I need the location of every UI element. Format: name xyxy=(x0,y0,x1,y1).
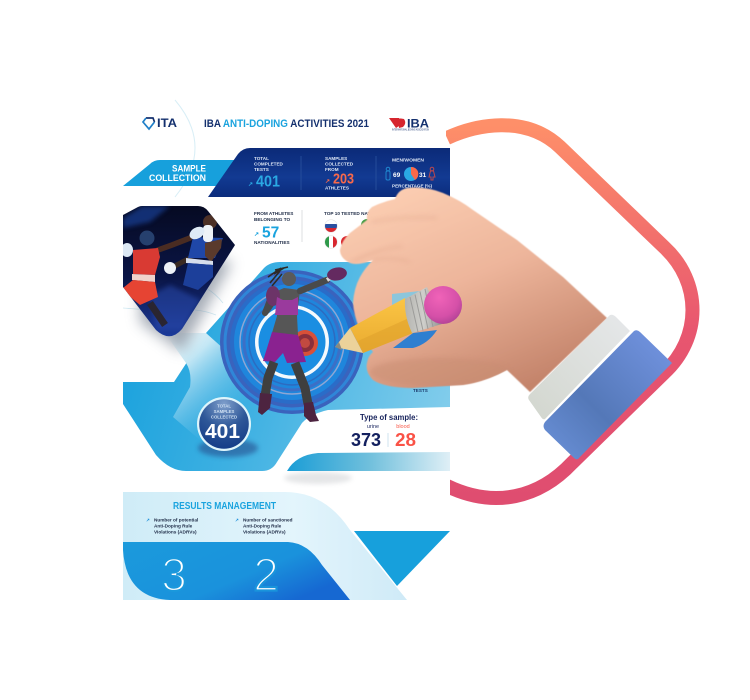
samples collected: COLLECTED xyxy=(325,162,354,166)
total completed tests: TOTAL xyxy=(254,156,269,161)
target rings xyxy=(220,270,364,414)
tests label: TESTS xyxy=(413,388,428,393)
nationalities block: NATIONALITIES xyxy=(254,240,290,245)
potential ADRVs text: Anti-Doping Rule xyxy=(154,524,193,528)
number: sanctioned: 2 xyxy=(253,548,279,600)
type of sample xyxy=(352,414,418,447)
total completed tests: COMPLETED xyxy=(254,162,284,166)
jacket cuff xyxy=(544,330,672,459)
nationalities block: 57 xyxy=(262,224,279,242)
infographic sheet xyxy=(121,100,450,600)
panel: photo of two boxers xyxy=(121,206,235,352)
title: IBA ANTI-DOPING ACTIVITIES 2021 xyxy=(204,118,369,130)
men and women share: 31 xyxy=(419,172,427,179)
potential ADRVs text: ↗ xyxy=(146,518,150,522)
samples collected: ATHLETES xyxy=(325,186,349,190)
chart: gender pie xyxy=(404,167,418,181)
icon: man xyxy=(386,167,390,180)
top tested nations flags xyxy=(324,212,369,248)
panel: blue lower band xyxy=(123,542,350,600)
potential ADRVs text: Violations (ADRVs) xyxy=(154,530,197,534)
white sample type panel xyxy=(316,407,450,414)
boxer in blue xyxy=(164,215,223,290)
gap above pencil xyxy=(392,291,420,305)
nationalities block: ↗ xyxy=(254,232,259,238)
sanctioned ADRVs text: Violations (ADRVs) xyxy=(243,530,286,534)
header xyxy=(143,116,429,132)
sanctioned ADRVs text: ↗ xyxy=(235,518,239,522)
panel: key figures banner xyxy=(208,148,450,197)
sanctioned ADRVs text: Anti-Doping Rule xyxy=(243,524,282,528)
ITA wordmark: ITA xyxy=(157,118,177,130)
hand xyxy=(340,188,607,392)
top tested nations flags: TOP 10 TESTED NATIONS xyxy=(324,211,382,216)
men and women share: PERCENTAGE (%) xyxy=(392,184,432,188)
triangle accent xyxy=(354,531,450,586)
potential ADRVs text xyxy=(146,518,198,534)
pencil ferrule xyxy=(405,287,442,333)
gap below pencil xyxy=(393,330,437,348)
IBA logo xyxy=(389,118,429,130)
boxer shorts xyxy=(263,332,306,363)
samples collected: FROM xyxy=(325,167,339,172)
lower gradient strip xyxy=(284,452,450,484)
boxer in red xyxy=(121,224,207,325)
pale diagonal band xyxy=(172,333,241,436)
boxer hair xyxy=(268,267,288,286)
sample collection tab: SAMPLE xyxy=(172,164,206,174)
illustration: hand holding pencil xyxy=(335,188,672,459)
samples collected: 203 xyxy=(333,172,354,188)
sanctioned ADRVs text xyxy=(235,518,293,534)
flag: green nation xyxy=(361,219,368,226)
pencil eraser xyxy=(424,286,462,324)
sample collection tab xyxy=(123,160,235,186)
panel: blue hexagon background xyxy=(123,262,450,471)
total completed tests: 401 xyxy=(256,174,280,190)
IBA logo: INTERNATIONAL BOXING ASSOCIATION xyxy=(392,128,429,132)
badge: total samples collected: COLLECTED xyxy=(211,414,237,420)
icon: woman xyxy=(429,167,435,180)
total completed tests xyxy=(248,157,283,186)
potential ADRVs text: Number of potential xyxy=(154,518,198,522)
panel: results management xyxy=(123,492,450,600)
total completed tests: ↗ xyxy=(248,182,253,188)
icon: ITA shield logo xyxy=(143,118,154,129)
sanctioned ADRVs text: Number of sanctioned xyxy=(243,518,293,522)
type of sample: 28 xyxy=(395,430,416,450)
type of sample: Type of sample: xyxy=(360,412,418,422)
flag: red nation xyxy=(341,236,348,246)
flag: Italy xyxy=(324,235,338,249)
type of sample: urine xyxy=(367,424,379,430)
pencil xyxy=(335,286,462,353)
number: potential: 3 xyxy=(161,548,187,600)
badge: total samples collected: TOTAL xyxy=(217,404,231,408)
samples collected: ↗ xyxy=(325,179,330,185)
nationalities block: FROM ATHLETES xyxy=(254,211,293,216)
type of sample: 373 xyxy=(351,430,381,450)
decorative ring outline xyxy=(445,125,692,498)
badge: total samples collected xyxy=(197,397,258,457)
boxer torso xyxy=(272,288,300,335)
boxer boots xyxy=(258,393,272,415)
boxer legs xyxy=(265,362,274,396)
badge: total samples collected: 401 xyxy=(205,420,240,443)
type of sample: blood xyxy=(396,424,410,430)
IBA logo: IBA xyxy=(407,116,429,130)
infographic scene xyxy=(123,100,700,600)
heading: RESULTS MANAGEMENT xyxy=(173,501,276,512)
nationalities block: BELONGING TO xyxy=(254,217,290,222)
samples collected: SAMPLES xyxy=(325,156,347,161)
shirt cuff xyxy=(528,315,630,419)
total completed tests: TESTS xyxy=(254,167,269,172)
badge: total samples collected: SAMPLES xyxy=(214,409,235,414)
sample collection tab: COLLECTION xyxy=(149,173,206,183)
boxer figure xyxy=(258,266,348,422)
flag: Russia xyxy=(324,219,338,233)
men and women share: MEN/WOMEN xyxy=(392,158,425,162)
men and women share xyxy=(386,158,435,188)
hand shading xyxy=(352,218,510,386)
samples collected xyxy=(325,156,354,190)
men and women share: 69 xyxy=(393,172,401,179)
nationalities block xyxy=(254,210,302,245)
